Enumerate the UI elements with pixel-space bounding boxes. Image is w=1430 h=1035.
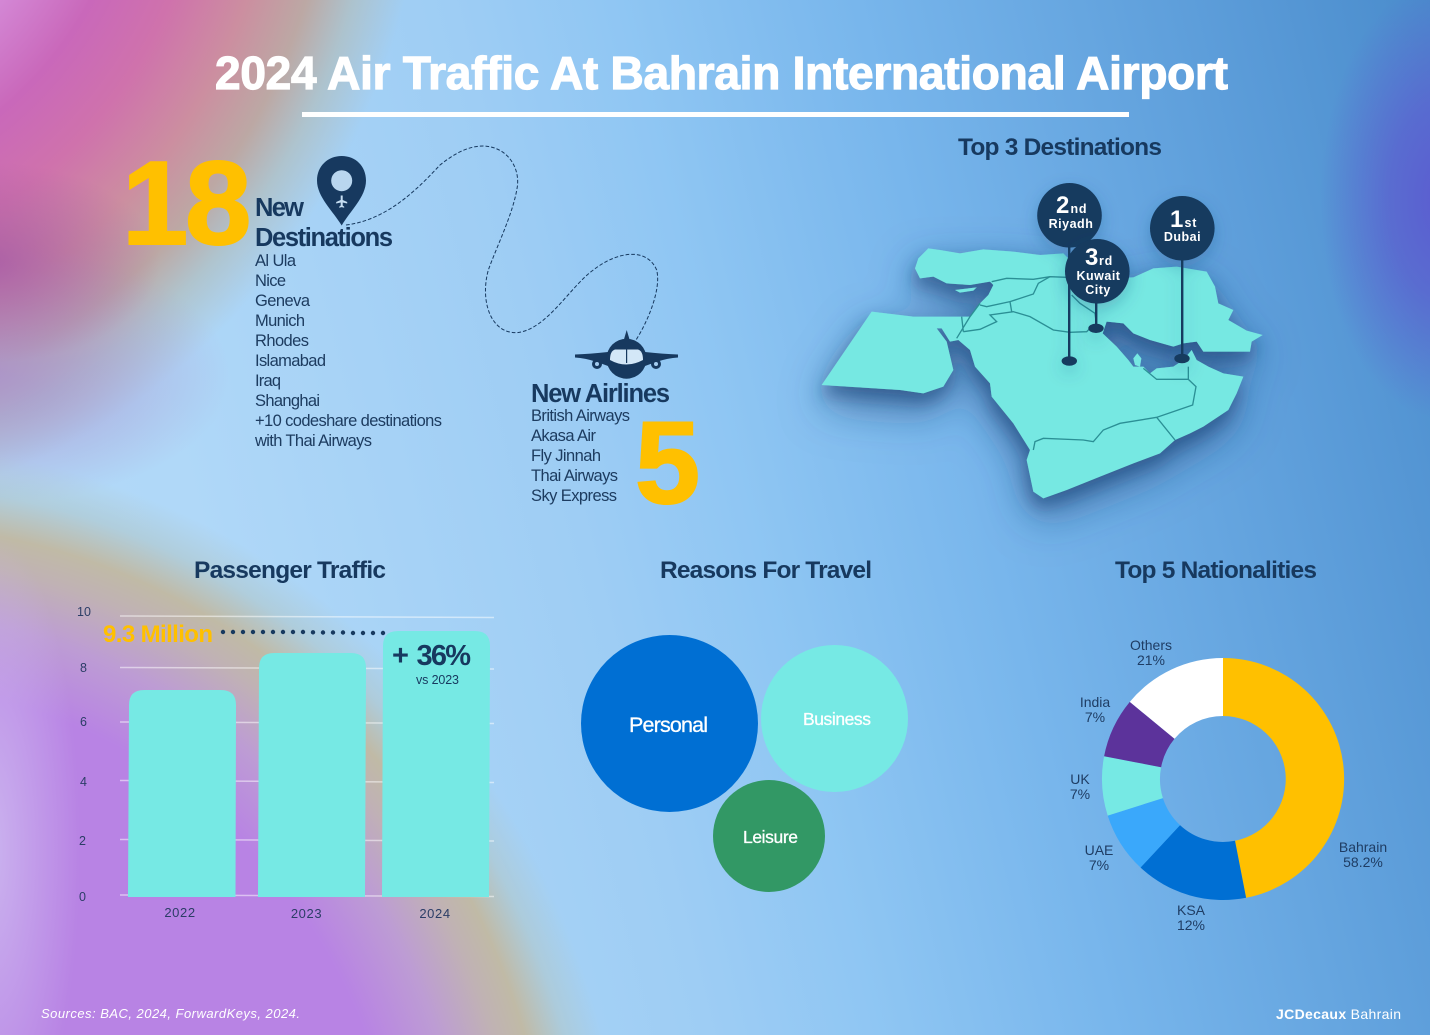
pin: 3rd Kuwait City: 3 — [1085, 244, 1098, 271]
heading: reasons for travel: Reasons For Travel — [660, 557, 872, 584]
top 3 destinations panel — [822, 134, 1263, 498]
bar chart — [77, 605, 494, 921]
year labels: 2023 — [291, 906, 322, 921]
bubble: leisure: Leisure — [743, 827, 798, 847]
icon: airplane — [575, 330, 678, 379]
axis labels: 8 — [80, 661, 87, 675]
icon: location pin with plane — [317, 156, 366, 226]
axis labels — [77, 605, 91, 904]
year labels: 2022 — [164, 905, 196, 920]
pin: 3rd Kuwait City — [1065, 239, 1130, 333]
donut labels: 7% — [1085, 709, 1105, 725]
new airlines panel — [531, 330, 700, 528]
destinations list: Nice — [255, 272, 286, 290]
donut labels: 7% — [1089, 857, 1109, 873]
destinations list: with Thai Airways — [254, 432, 372, 450]
destinations list: Islamabad — [255, 352, 326, 370]
destinations list: Rhodes — [255, 332, 309, 350]
heading: new airlines: New Airlines — [531, 380, 670, 408]
pin: 3rd Kuwait City: Kuwait — [1077, 269, 1121, 283]
donut labels: 12% — [1177, 917, 1205, 933]
heading: new destinations: New — [255, 194, 304, 222]
big number 18: 18 — [122, 137, 248, 270]
airlines list — [531, 407, 630, 505]
donut labels: 7% — [1070, 786, 1090, 802]
brand credit: JCDecaux Bahrain — [1276, 1006, 1401, 1022]
donut labels: UAE — [1085, 842, 1113, 858]
pin: 2nd Riyadh — [1037, 183, 1102, 366]
bars — [128, 631, 490, 897]
passenger traffic panel — [77, 557, 494, 921]
heading: new destinations: Destinations — [255, 224, 393, 252]
callout: 9.3 million — [103, 621, 385, 648]
donut labels: Others — [1130, 637, 1172, 653]
pin: 1st Dubai: Dubai — [1164, 230, 1201, 244]
year labels: 2024 — [419, 906, 451, 921]
callout: +36% vs 2023: vs 2023 — [416, 673, 459, 687]
destinations list: Iraq — [255, 372, 281, 390]
donut labels — [1070, 637, 1387, 933]
new destinations panel — [122, 137, 442, 450]
destinations list: Shanghai — [255, 392, 320, 410]
pin: 3rd Kuwait City: City — [1085, 283, 1111, 297]
pin: 2nd Riyadh: Riyadh — [1049, 217, 1093, 231]
top 5 nationalities panel — [1070, 557, 1387, 933]
pin: 3rd Kuwait City: rd — [1099, 254, 1113, 268]
pin: 2nd Riyadh: nd — [1070, 202, 1087, 216]
axis labels: 6 — [80, 715, 87, 729]
axis labels: 4 — [80, 775, 87, 789]
title: 2024 Air Traffic At Bahrain International Airport — [215, 47, 1228, 99]
reasons for travel panel — [581, 557, 908, 892]
destinations list: Al Ula — [255, 252, 297, 270]
airlines list: Sky Express — [531, 487, 617, 505]
axis labels: 10 — [77, 605, 91, 619]
bubble: business — [761, 645, 908, 792]
destinations list: Munich — [255, 312, 305, 330]
year labels — [164, 905, 451, 921]
pin: 1st Dubai: 1 — [1170, 206, 1183, 233]
donut chart — [1102, 658, 1344, 900]
donut labels: UK — [1070, 771, 1090, 787]
pin: 1st Dubai: st — [1184, 216, 1197, 230]
callout: 9.3 million: 9.3 Million — [103, 621, 213, 648]
route: dashed flight path — [346, 146, 658, 340]
airlines list: Akasa Air — [531, 427, 596, 445]
axis labels: 2 — [79, 834, 86, 848]
donut labels: 58.2% — [1343, 854, 1383, 870]
callout: +36% vs 2023 — [392, 640, 471, 687]
destinations list: Geneva — [255, 292, 311, 310]
callout: +36% vs 2023: + 36% — [392, 640, 471, 672]
pin: 1st Dubai — [1150, 196, 1215, 363]
airlines list: Thai Airways — [531, 467, 618, 485]
bubble: personal: Personal — [629, 713, 708, 737]
bubble: personal — [581, 635, 758, 812]
donut labels: India — [1080, 694, 1110, 710]
donut labels: Bahrain — [1339, 839, 1387, 855]
map of the Middle East — [822, 248, 1263, 498]
bubble: leisure — [713, 780, 825, 892]
sources footer: Sources: BAC, 2024, ForwardKeys, 2024. — [41, 1006, 300, 1021]
heading: top 3 destinations: Top 3 Destinations — [958, 134, 1162, 161]
donut labels: 21% — [1137, 652, 1165, 668]
country borders — [957, 277, 1196, 450]
bubble: business: Business — [803, 709, 871, 729]
donut labels: KSA — [1177, 902, 1206, 918]
destinations list — [254, 252, 442, 450]
axis labels: 0 — [79, 890, 86, 904]
heading: top 5 nationalities: Top 5 Nationalities — [1115, 557, 1317, 584]
destinations list: +10 codeshare destinations — [255, 412, 442, 430]
airlines list: Fly Jinnah — [531, 447, 601, 465]
big number 5: 5 — [635, 397, 700, 528]
pin: 2nd Riyadh: 2 — [1056, 192, 1069, 219]
airlines list: British Airways — [531, 407, 630, 425]
heading: passenger traffic: Passenger Traffic — [194, 557, 386, 584]
